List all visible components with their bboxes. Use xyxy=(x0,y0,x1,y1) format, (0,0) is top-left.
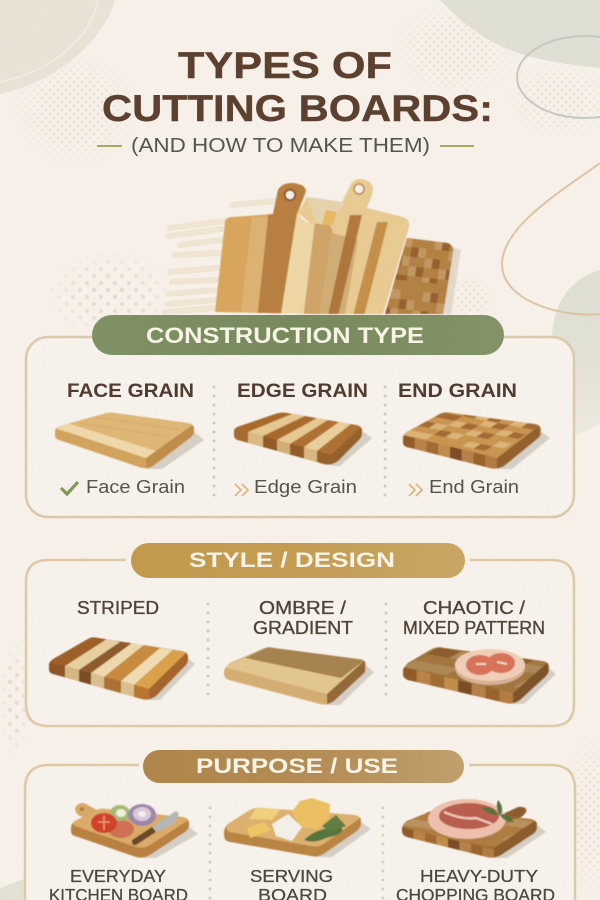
board: serving xyxy=(224,798,371,857)
icon: herbs xyxy=(482,800,514,822)
board: edge grain xyxy=(233,412,372,466)
board: striped middle xyxy=(298,178,410,315)
column titles: CHAOTIC / xyxy=(423,598,525,618)
column titles: GRADIENT xyxy=(253,618,353,638)
board: striped xyxy=(48,636,195,700)
column titles: EDGE GRAIN xyxy=(237,381,368,402)
blob: top right xyxy=(440,0,600,68)
icon: t-bone steak xyxy=(428,799,506,839)
blob: right sage xyxy=(552,270,600,436)
board: main front xyxy=(214,182,333,315)
use labels: HEAVY-DUTY xyxy=(420,866,538,886)
use labels xyxy=(49,866,555,900)
column titles: MIXED PATTERN xyxy=(403,618,545,638)
column titles xyxy=(77,598,545,638)
title xyxy=(102,45,493,129)
board: ombre xyxy=(223,646,374,706)
ring: tan outline xyxy=(502,163,600,315)
title: CUTTING BOARDS: xyxy=(102,88,493,129)
panel: style / design xyxy=(26,543,600,726)
subtitle: (AND HOW TO MAKE THEM) xyxy=(131,135,430,157)
icon: knife xyxy=(132,811,179,845)
column titles: STRIPED xyxy=(77,598,159,618)
panel: purpose / use xyxy=(25,750,600,900)
heading pill: construction type: CONSTRUCTION TYPE xyxy=(146,323,424,348)
board: end grain xyxy=(402,412,550,470)
use labels: SERVING xyxy=(250,866,333,886)
board: heavy-duty chopping xyxy=(401,798,546,858)
heading pill: purpose / use: PURPOSE / USE xyxy=(196,755,398,778)
label: end grain with chevrons: End Grain xyxy=(429,476,519,497)
column titles: END GRAIN xyxy=(398,381,517,402)
board: chaotic xyxy=(402,646,556,704)
label: face grain with check: Face Grain xyxy=(86,476,185,497)
heading pill: style / design xyxy=(131,543,465,578)
blob: top left xyxy=(0,0,115,94)
panel: construction type xyxy=(26,315,578,517)
title: TYPES OF xyxy=(178,45,392,86)
board: end grain at back xyxy=(384,237,461,315)
icon: steak xyxy=(455,649,525,685)
ring: grey ellipse xyxy=(517,36,600,118)
icon: cheese and herbs xyxy=(247,798,346,842)
column titles xyxy=(67,381,517,402)
heading pill: purpose / use xyxy=(143,750,464,783)
column titles: FACE GRAIN xyxy=(67,381,194,402)
heading pill: style / design: STYLE / DESIGN xyxy=(189,549,395,572)
board: everyday kitchen xyxy=(71,803,198,858)
hero: stack of three cutting boards xyxy=(214,178,461,315)
label: edge grain with chevrons: Edge Grain xyxy=(254,476,357,497)
blob: bottom left xyxy=(0,879,24,900)
heading pill: construction type xyxy=(92,315,504,355)
use labels: EVERYDAY xyxy=(70,866,166,886)
icon: vegetables xyxy=(91,804,156,838)
board: face grain xyxy=(54,412,204,470)
column titles: OMBRE / xyxy=(259,598,346,618)
brush strokes xyxy=(165,201,275,312)
